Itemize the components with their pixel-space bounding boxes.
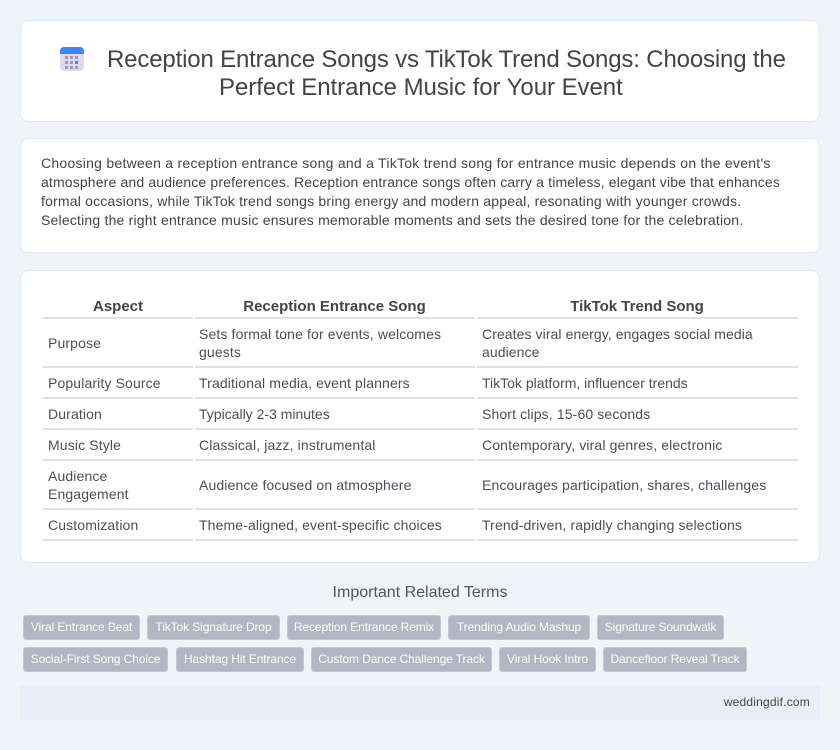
- related term tags: Viral Entrance Beat: [31, 620, 132, 634]
- comparison table: Popularity Source: [48, 375, 161, 391]
- comparison table: Audience: [48, 468, 107, 484]
- intro paragraph: formal occasions, while TikTok trend songs bring energy and modern appeal, resonating with younger crowds.: [41, 193, 741, 209]
- title: Reception Entrance Songs vs TikTok Trend Songs: Choosing the: [107, 46, 786, 73]
- title panel: [20, 20, 820, 122]
- comparison table: Traditional media, event planners: [199, 375, 410, 391]
- comparison table: Theme-aligned, event-specific choices: [199, 517, 442, 533]
- comparison table: Encourages participation, shares, challenges: [482, 477, 766, 493]
- title: Perfect Entrance Music for Your Event: [219, 74, 623, 101]
- intro paragraph: atmosphere and audience preferences. Reception entrance songs often carry a timeless, elegant vibe that enhances: [41, 174, 780, 190]
- related term tags: Hashtag Hit Entrance: [184, 652, 296, 666]
- related term tags: Signature Soundwalk: [605, 620, 716, 634]
- comparison table: Creates viral energy, engages social media: [482, 326, 753, 342]
- comparison table: Reception Entrance Song: [243, 298, 426, 315]
- comparison table: Aspect: [93, 298, 143, 315]
- comparison table: [43, 298, 798, 541]
- comparison table panel: [20, 270, 820, 563]
- related term tags: [23, 615, 747, 672]
- comparison table: Audience focused on atmosphere: [199, 477, 412, 493]
- footer source: weddingdif.com: [724, 695, 810, 709]
- comparison table: Engagement: [48, 486, 129, 502]
- comparison table: Typically 2-3 minutes: [199, 406, 330, 422]
- comparison table: Duration: [48, 406, 102, 422]
- related term tags: Dancefloor Reveal Track: [610, 652, 740, 666]
- intro paragraph: [41, 155, 780, 228]
- comparison table: TikTok platform, influencer trends: [482, 375, 688, 391]
- intro text panel: [20, 138, 820, 253]
- comparison table: Short clips, 15-60 seconds: [482, 406, 650, 422]
- comparison table: Purpose: [48, 335, 101, 351]
- related term tags: Viral Hook Intro: [507, 652, 588, 666]
- footer bar: [20, 686, 820, 720]
- comparison table: Music Style: [48, 437, 121, 453]
- comparison table: Contemporary, viral genres, electronic: [482, 437, 722, 453]
- comparison table: Customization: [48, 517, 138, 533]
- icon: calendar: [60, 47, 84, 71]
- comparison table: Classical, jazz, instrumental: [199, 437, 376, 453]
- related term tags: Trending Audio Mashup: [457, 620, 581, 634]
- related term tags: Reception Entrance Remix: [294, 620, 434, 634]
- related term tags: TikTok Signature Drop: [155, 620, 272, 634]
- comparison table: Sets formal tone for events, welcomes: [199, 326, 441, 342]
- related term tags: Custom Dance Challenge Track: [318, 652, 485, 666]
- intro paragraph: Choosing between a reception entrance song and a TikTok trend song for entrance music depends on the event's: [41, 155, 771, 171]
- title: [107, 46, 786, 101]
- intro paragraph: Selecting the right entrance music ensures memorable moments and sets the desired tone for the celebration.: [41, 212, 743, 228]
- comparison table: TikTok Trend Song: [570, 298, 704, 315]
- comparison table: Trend-driven, rapidly changing selections: [482, 517, 742, 533]
- comparison table: guests: [199, 344, 241, 360]
- comparison table: audience: [482, 344, 539, 360]
- related terms heading: Important Related Terms: [333, 584, 507, 601]
- related term tags: Social-First Song Choice: [31, 652, 160, 666]
